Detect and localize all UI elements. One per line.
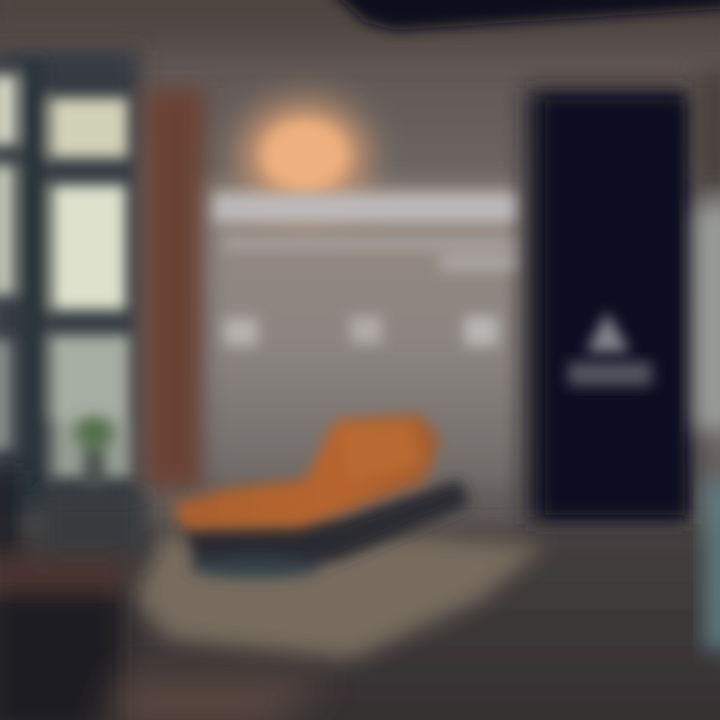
door icon	[586, 312, 630, 352]
dark door surround	[526, 88, 692, 524]
chair shadow	[185, 480, 470, 578]
orange chair	[170, 414, 440, 530]
floor	[0, 528, 720, 720]
lamp glow	[245, 105, 365, 205]
blurred heading	[214, 194, 518, 222]
blurred subheading lines	[225, 238, 520, 270]
light wall panel	[208, 185, 520, 485]
dark ceiling opening	[325, 0, 720, 30]
foreground warm floor strip	[100, 675, 330, 720]
blurred feature icons	[224, 316, 498, 346]
door caption	[568, 362, 652, 386]
dark door	[545, 100, 685, 515]
rug	[135, 535, 545, 660]
lower right teal object	[705, 480, 720, 650]
curtain	[145, 88, 205, 488]
right edge window	[695, 70, 720, 430]
plant	[75, 417, 113, 490]
side table	[0, 470, 145, 720]
window frame	[0, 50, 140, 520]
window panes	[0, 60, 132, 500]
ceiling	[0, 0, 720, 40]
lamp core	[263, 121, 347, 189]
